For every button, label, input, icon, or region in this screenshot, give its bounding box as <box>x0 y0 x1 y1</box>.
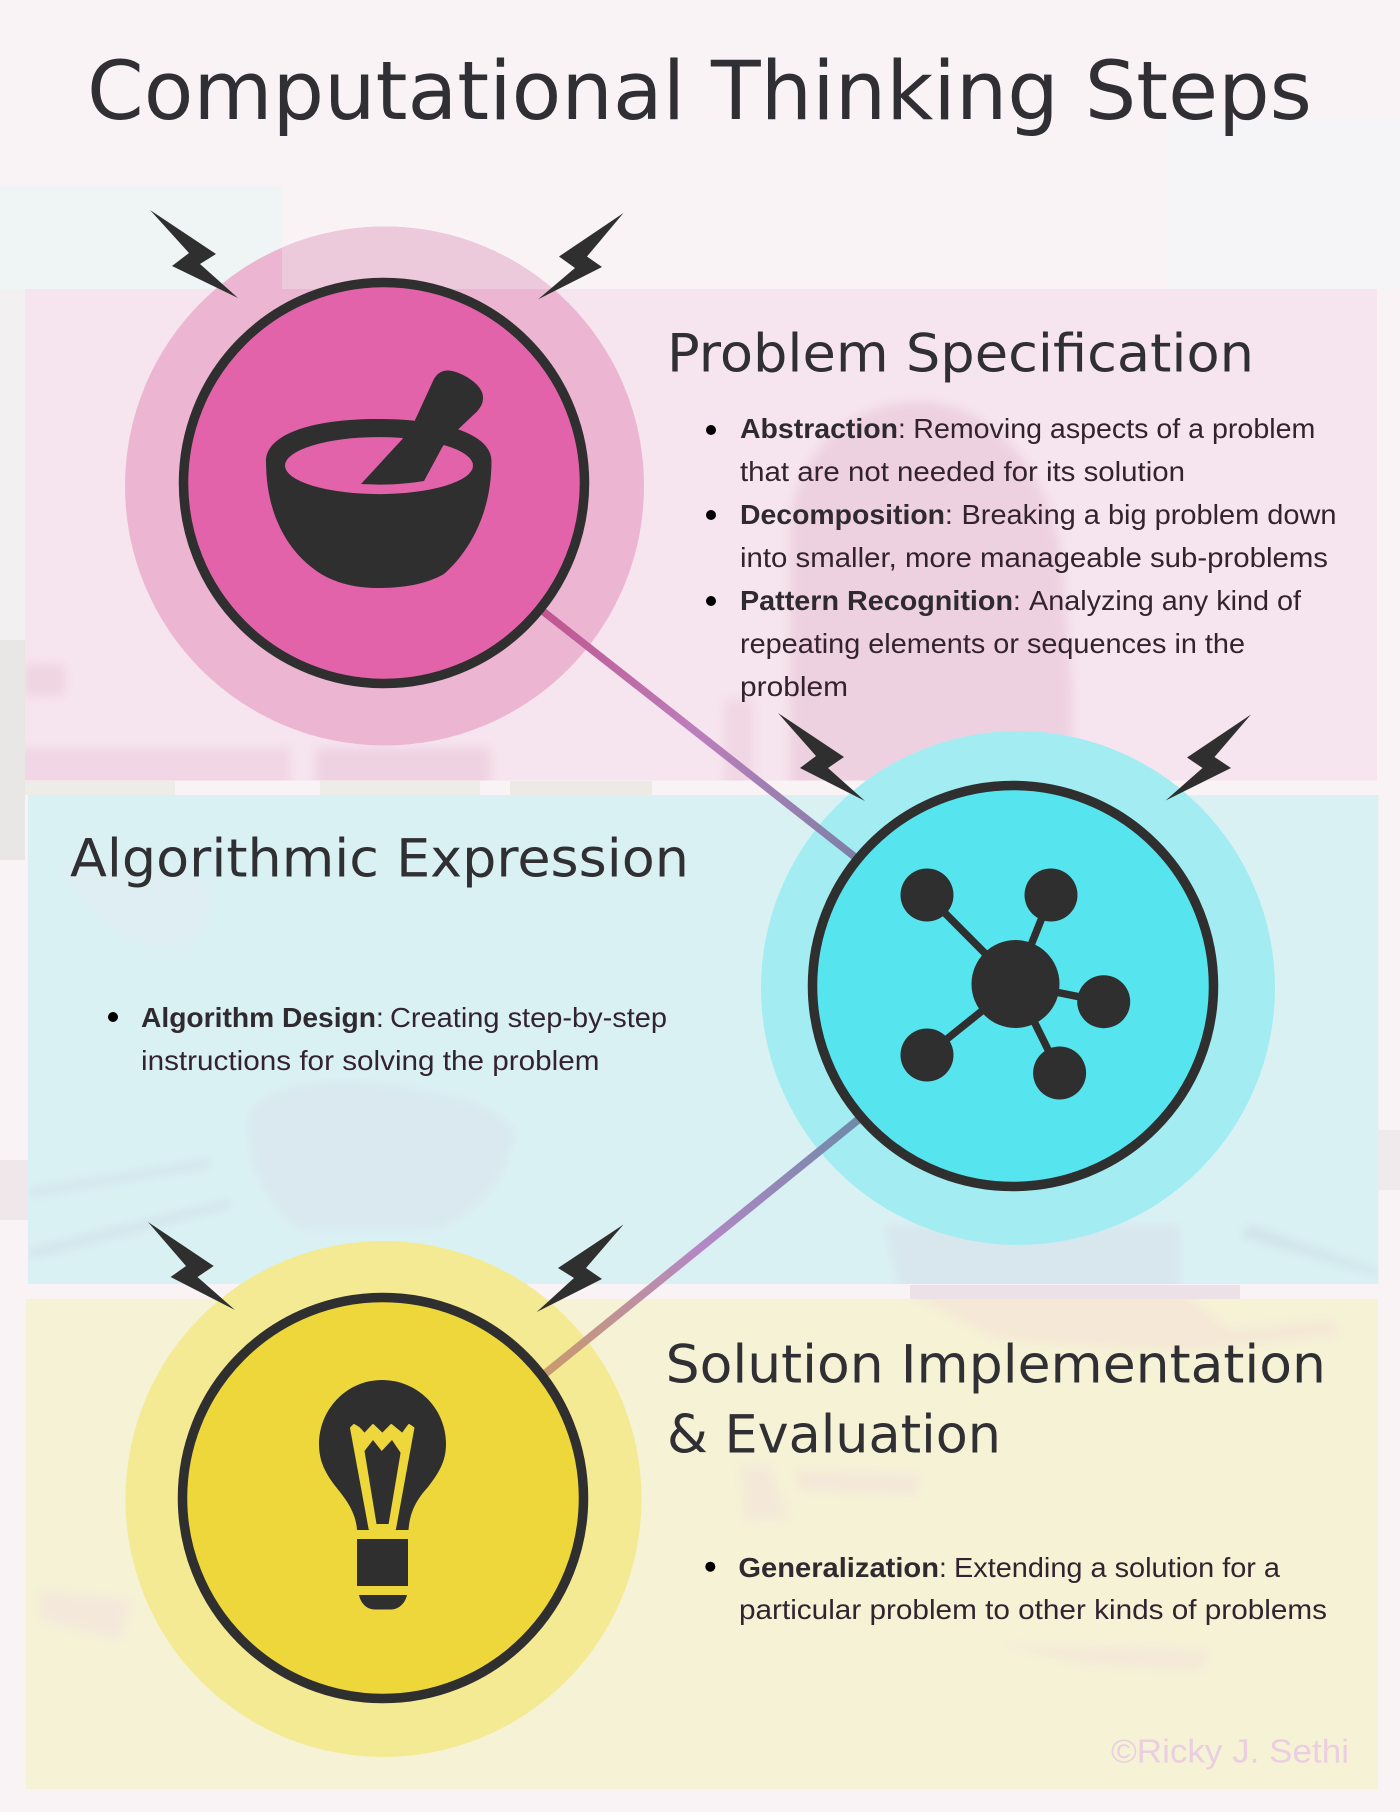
text block: solution bullet: Extending a solution for a <box>954 1552 1280 1583</box>
icon: left lightning bolt <box>778 713 865 801</box>
text block: solution bullet: particular problem to other kinds of problems <box>739 1594 1327 1625</box>
connector: problem to algorithm <box>535 605 860 861</box>
text block: problem specification bullets: repeating elements or sequences in the <box>740 628 1245 659</box>
step 2 badge: network <box>778 713 1251 1186</box>
text block: problem specification bullets: Decomposition <box>740 499 945 530</box>
text block: problem specification bullets: : <box>898 413 906 444</box>
heading: Solution Implementation and Evaluation: Solution Implementation <box>666 1334 1326 1396</box>
text block: algorithmic expression bullet: instructions for solving the problem <box>141 1045 600 1076</box>
text block: algorithmic expression bullet: Creating step-by-step <box>390 1002 667 1033</box>
text block: algorithmic expression bullet: Algorithm Design <box>141 1002 376 1033</box>
halo: yellow <box>126 1241 642 1757</box>
text block: solution bullet: : <box>939 1552 947 1583</box>
title: Computational Thinking Steps <box>87 45 1312 139</box>
icon: right lightning bolt <box>537 1224 624 1312</box>
text block: problem specification bullets <box>706 413 1336 702</box>
watermark: copyright: ©Ricky J. Sethi <box>1111 1732 1349 1770</box>
text block: problem specification bullets: problem <box>740 671 848 702</box>
panel: cyan band <box>28 795 1378 1294</box>
text block: problem specification bullets: Removing aspects of a problem <box>913 413 1315 444</box>
connector: algorithm to solution <box>541 1115 864 1377</box>
heading: Problem Specification: Problem Specification <box>667 324 1254 385</box>
text block: problem specification bullets: Abstraction <box>740 413 898 444</box>
icon: mortar and pestle <box>266 371 492 588</box>
circle: cyan <box>812 786 1214 1186</box>
heading: Solution Implementation and Evaluation: & Evaluation <box>667 1404 1001 1465</box>
text block: algorithmic expression bullet <box>108 1002 667 1076</box>
icon: light bulb <box>319 1380 446 1610</box>
text block: problem specification bullets: that are not needed for its solution <box>740 456 1185 487</box>
text block: problem specification bullets: Analyzing any kind of <box>1029 585 1301 616</box>
text block: problem specification bullets: : <box>945 499 953 530</box>
panel: yellow band <box>26 1290 1378 1789</box>
text block: problem specification bullets: : <box>1013 585 1021 616</box>
icon: right lightning bolt <box>1166 714 1251 800</box>
text block: algorithmic expression bullet: : <box>376 1002 384 1033</box>
circle: pink <box>184 282 584 684</box>
text block: solution bullet: Generalization <box>738 1552 939 1583</box>
panel: pink band <box>10 289 1377 793</box>
halo: pink <box>125 226 644 746</box>
text block: problem specification bullets: into smaller, more manageable sub-problems <box>740 542 1328 573</box>
step 3 badge: light bulb <box>148 1222 624 1698</box>
faded background photo, outside panels <box>0 120 1400 1299</box>
heading: Solution Implementation and Evaluation <box>666 1334 1326 1465</box>
circle: yellow <box>182 1298 584 1698</box>
text block: problem specification bullets: Pattern Recognition <box>740 585 1013 616</box>
heading: Algorithmic Expression: Algorithmic Expression <box>70 829 689 890</box>
text block: solution bullet <box>705 1552 1327 1625</box>
icon: right lightning bolt <box>538 213 624 299</box>
halo: cyan <box>761 731 1275 1245</box>
icon: left lightning bolt <box>148 1222 235 1310</box>
icon: left lightning bolt <box>150 210 238 298</box>
text block: problem specification bullets: Breaking a big problem down <box>962 499 1336 530</box>
icon: network nodes <box>900 868 1130 1100</box>
step 1 badge: mortar and pestle <box>150 210 624 684</box>
